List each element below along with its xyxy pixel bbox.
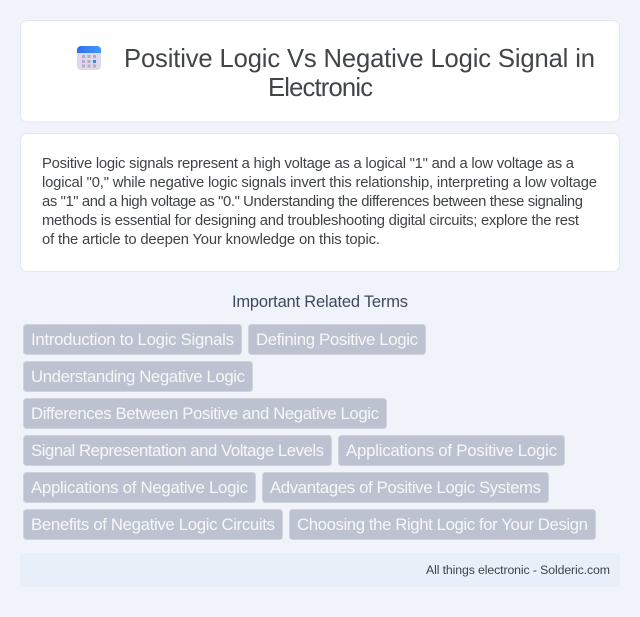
tag: applications of positive logic	[338, 436, 564, 466]
heading: important related terms: Important Related Terms	[232, 293, 408, 311]
description text	[42, 156, 597, 248]
tag: understanding negative logic	[24, 362, 252, 392]
tag: choosing the right logic: Choosing the Right Logic for Your Design	[297, 515, 588, 534]
tag: advantages of positive logic systems: Advantages of Positive Logic Systems	[270, 478, 541, 497]
footer	[20, 553, 620, 587]
tag: choosing the right logic	[290, 510, 596, 540]
panel: description	[20, 134, 620, 272]
description text: Positive logic signals represent a high voltage as a logical "1" and a low voltage as a	[42, 156, 575, 172]
tag: differences between: Differences Between Positive and Negative Logic	[31, 404, 379, 423]
title: Electronic	[268, 74, 373, 102]
tag: understanding negative logic: Understanding Negative Logic	[31, 367, 245, 386]
tag: differences between	[24, 398, 386, 428]
tag: advantages of positive logic systems	[262, 472, 548, 502]
tag: defining positive logic: Defining Positive Logic	[256, 330, 418, 349]
description text: logical "0," while negative logic signals invert this relationship, interpreting a low voltage	[42, 175, 597, 191]
tag: introduction to logic signals	[24, 324, 242, 354]
panel: header	[20, 20, 620, 122]
tag: benefits of negative logic circuits: Benefits of Negative Logic Circuits	[31, 515, 275, 534]
tag: defining positive logic	[248, 324, 426, 354]
tag: benefits of negative logic circuits	[24, 510, 282, 540]
description text: methods is essential for designing and troubleshooting digital circuits; explore the rest	[42, 213, 579, 229]
description text: of the article to deepen Your knowledge on this topic.	[42, 232, 380, 248]
tag: signal representation	[24, 436, 332, 466]
icon: calendar	[77, 46, 101, 70]
footer: All things electronic - Solderic.com	[426, 563, 610, 577]
title	[124, 45, 595, 102]
description text: as "1" and a high voltage as "0." Understanding the differences between these signaling	[42, 194, 583, 210]
tag: applications of positive logic: Applications of Positive Logic	[346, 441, 557, 460]
tag: signal representation: Signal Representation and Voltage Levels	[31, 441, 324, 460]
title: Positive Logic Vs Negative Logic Signal in	[124, 45, 595, 73]
tag: introduction to logic signals: Introduction to Logic Signals	[31, 330, 234, 349]
tag: applications of negative logic: Applications of Negative Logic	[31, 478, 248, 497]
tags	[24, 324, 596, 540]
tag: applications of negative logic	[24, 472, 256, 502]
